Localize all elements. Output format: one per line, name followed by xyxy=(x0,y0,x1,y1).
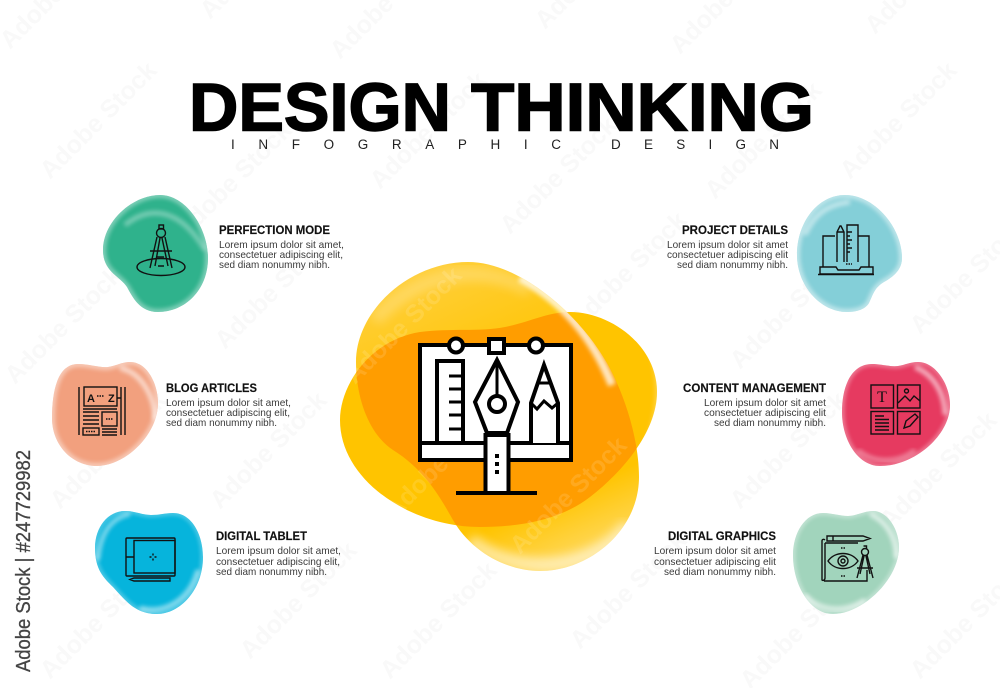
heading: DIGITAL TABLET xyxy=(216,531,307,543)
salmon blob xyxy=(52,362,158,466)
title: THINKING xyxy=(471,70,814,146)
background watermark: Adobe Stock xyxy=(0,261,127,389)
background watermark: Adobe Stock xyxy=(494,111,622,239)
subtitle xyxy=(231,137,779,152)
text block xyxy=(704,398,826,429)
background watermark: Adobe Stock xyxy=(364,66,492,194)
text block: consectetuer adipiscing elit xyxy=(704,408,826,419)
icon: newspaper: Z xyxy=(108,393,115,405)
blue blob xyxy=(95,511,203,614)
text block: sed diam nonummy nibh. xyxy=(166,418,277,429)
text block: consectetuer adipiscing elit, xyxy=(166,408,290,419)
panel: content management xyxy=(683,362,950,466)
heading: PROJECT DETAILS xyxy=(682,225,788,237)
green blob xyxy=(103,195,208,312)
title: DESIGN xyxy=(189,70,451,146)
icon: graphics tablet xyxy=(126,538,175,581)
subtitle: DESIGN xyxy=(611,137,779,152)
text block: Lorem ipsum dolor sit amet, xyxy=(216,546,341,557)
teal blob xyxy=(797,195,902,312)
title xyxy=(189,70,814,146)
background watermark: Adobe Stock xyxy=(44,386,172,514)
panel: project details xyxy=(667,195,902,312)
icon: eye, pen and compass xyxy=(822,536,873,581)
icon: newspaper: A xyxy=(87,393,95,405)
background watermark: Adobe Stock xyxy=(834,56,962,184)
background watermark: Adobe Stock xyxy=(699,76,827,204)
central blob xyxy=(339,261,658,571)
background watermark: Adobe Stock xyxy=(169,116,297,244)
text block: sed diam nonummy nibh. xyxy=(219,260,330,271)
icon: content tiles: T xyxy=(877,389,887,406)
text block xyxy=(219,240,344,271)
icon: content tiles xyxy=(871,385,920,434)
watermark on central blob: Adobe Stock xyxy=(339,261,467,389)
crimson blob xyxy=(842,362,950,466)
background watermark: Adobe Stock xyxy=(34,56,162,184)
text block xyxy=(166,398,291,429)
panel: blog articles xyxy=(52,362,291,466)
mint blob xyxy=(793,511,899,614)
background watermark: Adobe Stock xyxy=(564,206,692,334)
text block: consectetuer adipiscing elit xyxy=(654,557,776,568)
text block: sed diam nonummy nibh. xyxy=(664,567,776,578)
stock id side label: Adobe Stock | #247729982 xyxy=(13,450,35,672)
text block: sed diam nonummy nibh. xyxy=(677,260,788,271)
watermark on central blob: Adobe Stock xyxy=(379,396,507,524)
text block: consectetuer adipiscing elit, xyxy=(216,557,340,568)
background watermark: Adobe Stock xyxy=(204,386,332,514)
text block xyxy=(654,546,776,578)
background watermark: Adobe Stock xyxy=(724,386,852,514)
icon: laptop with pen and ruler xyxy=(818,225,874,274)
panel: digital tablet xyxy=(95,511,341,614)
text block: sed diam nonummy nibh. xyxy=(216,567,327,578)
heading: DIGITAL GRAPHICS xyxy=(668,531,776,543)
background watermark: Adobe Stock xyxy=(374,556,502,684)
background watermark: Adobe Stock xyxy=(209,226,337,354)
background watermark: Adobe Stock xyxy=(874,406,1000,534)
watermark on central blob xyxy=(339,261,632,559)
panel: perfection mode xyxy=(103,195,344,312)
heading: PERFECTION MODE xyxy=(219,225,330,237)
text block: Lorem ipsum dolor sit amet xyxy=(704,398,826,409)
text block: consectetuer adipiscing elit, xyxy=(219,250,343,261)
text block: Lorem ipsum dolor sit amet xyxy=(667,240,788,251)
icon: newspaper xyxy=(79,387,125,435)
background watermark: Adobe Stock xyxy=(564,526,692,654)
text block: Lorem ipsum dolor sit amet, xyxy=(219,240,344,251)
heading: BLOG ARTICLES xyxy=(166,383,257,395)
background watermark: Adobe Stock xyxy=(34,556,162,684)
icon: monitor with pen, ruler and pencil xyxy=(420,338,571,493)
text block: Lorem ipsum dolor sit amet, xyxy=(166,398,291,409)
text block: sed diam nonummy nibh. xyxy=(714,418,826,429)
subtitle: INFOGRAPHIC xyxy=(231,137,561,152)
text block: consectetuer adipiscing elit xyxy=(667,250,788,261)
text block xyxy=(667,240,788,271)
text block: Lorem ipsum dolor sit amet xyxy=(654,546,776,557)
background watermark: Adobe Stock xyxy=(234,536,362,664)
watermark on central blob: Adobe Stock xyxy=(504,431,632,559)
text block xyxy=(216,546,341,578)
background watermark: Adobe Stock xyxy=(724,246,852,374)
heading: CONTENT MANAGEMENT xyxy=(683,383,826,395)
icon: compass xyxy=(137,225,185,276)
panel: digital graphics xyxy=(654,511,899,614)
